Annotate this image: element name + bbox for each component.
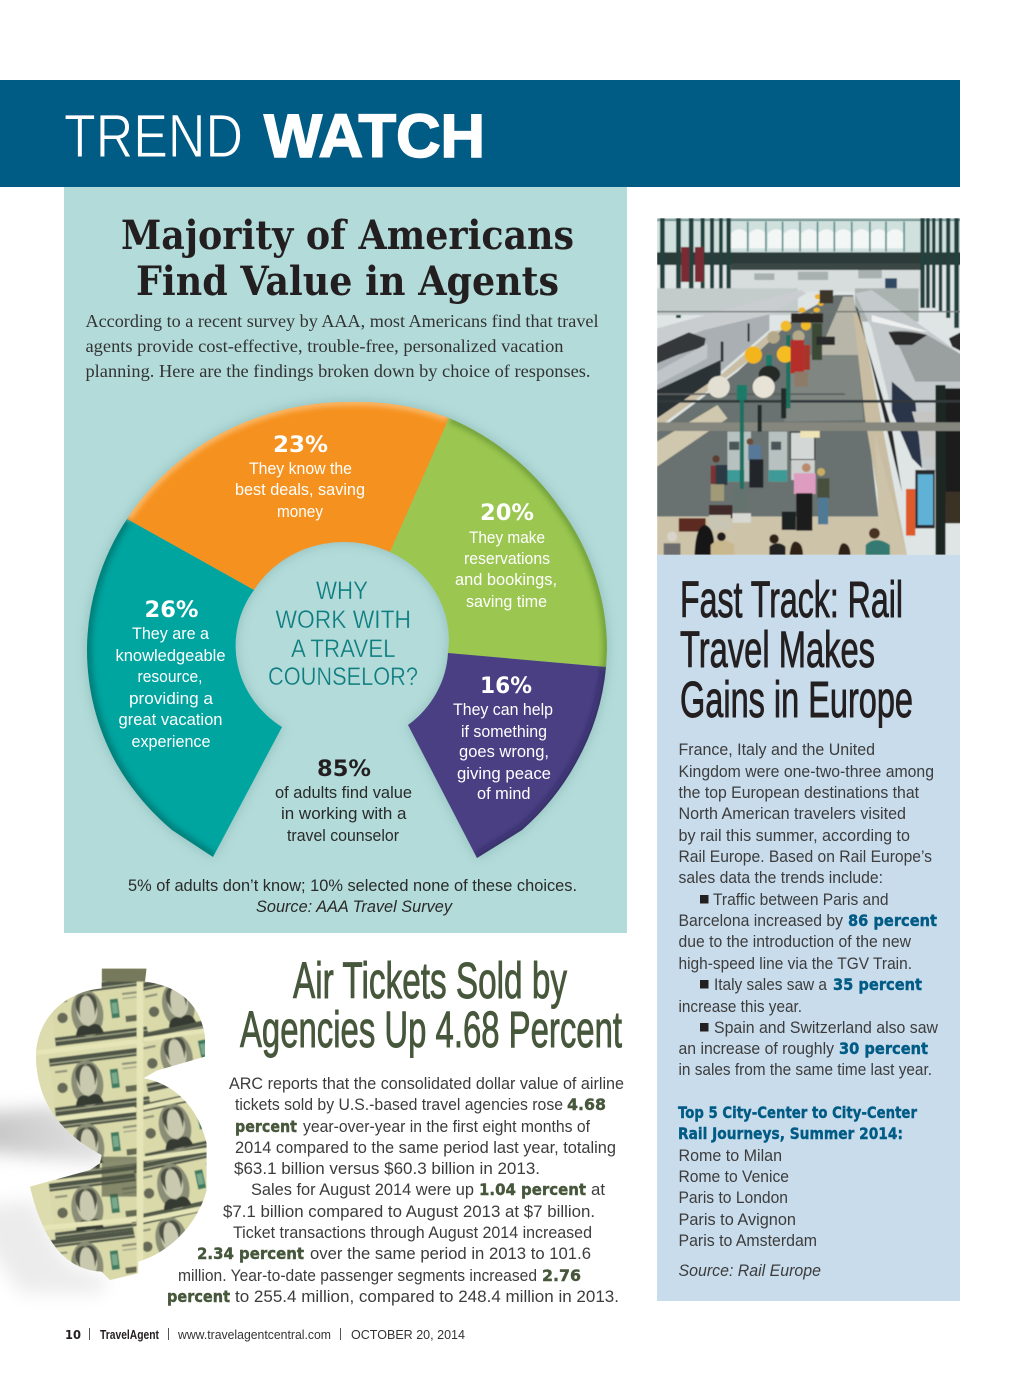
rail body text: Kingdom were one-two-three among [678, 763, 934, 781]
right train [855, 290, 962, 482]
label: 26 percent: resource, [138, 668, 202, 686]
air tickets body text: $63.1 billion versus $60.3 billion in 2013. [234, 1160, 540, 1178]
center question: WHY [316, 577, 368, 605]
intro text: planning. Here are the findings broken down by choice of responses. [86, 361, 590, 381]
main platform floor [657, 295, 878, 517]
panel: majority of Americans [64, 187, 627, 933]
intro text: According to a recent survey by AAA, most Americans find that travel [86, 311, 599, 331]
footer: TravelAgent [100, 1328, 160, 1342]
rail body text: 30 percent [839, 1039, 928, 1058]
footnote and source: Source: AAA Travel Survey [256, 898, 454, 916]
top 5 list heading [678, 1103, 917, 1143]
intro text [86, 311, 599, 381]
rail heading: Fast Track: Rail [680, 571, 903, 628]
air tickets body text: percent [167, 1287, 230, 1306]
rail body text: an increase of roughly [678, 1040, 835, 1058]
label: 20 percent: saving time [466, 593, 547, 611]
footer: OCTOBER 20, 2014 [351, 1328, 465, 1342]
label: 23 percent: best deals, saving [235, 481, 365, 499]
label: 85 percent: of adults find value [275, 784, 412, 802]
rail body text: due to the introduction of the new [678, 933, 911, 951]
label: 26 percent [116, 598, 226, 751]
rail body text: Rail Europe. Based on Rail Europe’s [678, 848, 932, 866]
rail body text: the top European destinations that [678, 784, 919, 802]
overhead wires [657, 422, 962, 431]
air tickets body text: 4.68 [567, 1095, 606, 1114]
air tickets heading: Air Tickets Sold by [293, 952, 567, 1009]
right platform edge [853, 312, 907, 555]
donut chart [87, 402, 607, 858]
air tickets body text: 2.34 percent [197, 1244, 304, 1263]
rail source: Source: Rail Europe [678, 1262, 821, 1280]
top 5 list: Paris to London [678, 1189, 788, 1207]
rail body text: 35 percent [833, 975, 922, 994]
air tickets body text: to 255.4 million, compared to 248.4 million in 2013. [235, 1288, 619, 1306]
label: 20 percent: 20% [480, 501, 534, 526]
label: 26 percent: experience [132, 733, 210, 751]
top 5 list: Rome to Venice [678, 1168, 789, 1186]
illustration: dollar sign made of bills [0, 968, 207, 1294]
label: 20 percent: reservations [464, 550, 550, 568]
rail body text: 86 percent [848, 911, 937, 930]
top 5 list: Rome to Milan [678, 1147, 782, 1165]
label: 85 percent: travel counselor [287, 827, 399, 845]
air tickets body text: over the same period in 2013 to 101.6 [310, 1245, 591, 1263]
intro text: agents provide cost-effective, trouble-free, personalized vacation [86, 336, 564, 356]
label: 16 percent: They can help [453, 701, 553, 719]
center question: WORK WITH [276, 606, 411, 634]
label: 16 percent: of mind [477, 785, 530, 803]
segment: 23% orange [127, 402, 449, 590]
header title: TREND [64, 102, 243, 170]
center question: COUNSELOR? [268, 663, 418, 691]
top 5 list heading: Top 5 City-Center to City-Center [678, 1103, 917, 1122]
footer: www.travelagentcentral.com [177, 1328, 331, 1342]
label: 26 percent: great vacation [118, 711, 222, 729]
air tickets body text: 1.04 percent [479, 1180, 586, 1199]
label: 16 percent: if something [461, 723, 547, 741]
label: 23 percent [235, 433, 365, 521]
label: 26 percent: knowledgeable [116, 647, 226, 665]
rail body text: North American travelers visited [678, 805, 906, 823]
label: 16 percent: goes wrong, [459, 743, 549, 761]
rail body text: increase this year. [678, 998, 802, 1016]
center question [268, 577, 418, 691]
label: 26 percent: They are a [132, 625, 210, 643]
photo: train station [657, 215, 962, 560]
panel: fast track rail [657, 555, 960, 1301]
rail body text: Traffic between Paris and [713, 891, 888, 909]
label: 20 percent: They make [469, 529, 545, 547]
left train [657, 290, 806, 348]
footnote and source [128, 877, 577, 916]
label: 26 percent: providing a [129, 690, 214, 708]
header title: WATCH [264, 102, 485, 170]
air tickets body text: tickets sold by U.S.-based travel agencies rose [235, 1096, 563, 1114]
panel heading: Majority of Americans [121, 212, 574, 259]
center question: A TRAVEL [291, 635, 396, 663]
rail body text: by rail this summer, according to [678, 827, 910, 845]
air tickets body text: at [591, 1181, 605, 1199]
header band [0, 80, 960, 187]
label: 23 percent: They know the [249, 460, 352, 478]
label: 16 percent [453, 674, 553, 803]
panel heading [121, 212, 574, 305]
rail heading: Travel Makes [680, 621, 875, 678]
ticket machines [727, 432, 787, 482]
label: 85 percent: 85% [317, 757, 371, 782]
top 5 list heading: Rail Journeys, Summer 2014: [678, 1124, 903, 1143]
rail body text: Italy sales saw a [714, 976, 828, 994]
label: 26 percent: 26% [144, 598, 198, 623]
panel: air tickets article [167, 952, 624, 1306]
top 5 list: Paris to Amsterdam [678, 1232, 817, 1250]
footer [65, 1327, 465, 1342]
rail heading [680, 571, 913, 728]
people [710, 465, 716, 484]
label: 16 percent: 16% [480, 674, 532, 699]
air tickets heading: Agencies Up 4.68 Percent [240, 1001, 622, 1058]
rail body text: sales data the trends include: [678, 869, 883, 887]
label: 23 percent: money [277, 503, 324, 521]
air tickets body text: ARC reports that the consolidated dollar value of airline [229, 1075, 624, 1093]
rail body text: high-speed line via the TGV Train. [678, 955, 912, 973]
left columns [660, 218, 731, 318]
air tickets body text [167, 1075, 624, 1306]
air tickets body text: million. Year-to-date passenger segments increased [178, 1267, 537, 1285]
air tickets body text: 2014 compared to the same period last year, totaling [235, 1139, 616, 1157]
label: 23 percent: 23% [273, 433, 328, 458]
lower floor [657, 517, 888, 555]
dollar shadow [0, 1107, 110, 1293]
label: 85 percent [275, 757, 412, 845]
panel heading: Find Value in Agents [136, 258, 559, 305]
label: 16 percent: giving peace [457, 765, 551, 783]
air tickets body text: Sales for August 2014 were up [251, 1181, 474, 1199]
rail body text: in sales from the same time last year. [678, 1061, 932, 1079]
air tickets body text: Ticket transactions through August 2014 increased [233, 1224, 592, 1242]
label: 20 percent: and bookings, [455, 571, 557, 589]
air tickets body text: $7.1 billion compared to August 2013 at $7 billion. [223, 1203, 595, 1221]
segment: 16% purple [408, 653, 606, 858]
air tickets body text: 2.76 [542, 1266, 581, 1285]
air tickets body text: percent [235, 1117, 297, 1136]
top 5 list: Paris to Avignon [678, 1211, 796, 1229]
top 5 list [678, 1147, 817, 1250]
segment: 20% green [390, 418, 607, 667]
rail body text: Barcelona increased by [678, 912, 844, 930]
rail body text: France, Italy and the United [678, 741, 875, 759]
rail body text [678, 741, 938, 1079]
rail body text: Spain and Switzerland also saw [714, 1019, 938, 1037]
air tickets heading [240, 952, 622, 1058]
header title [64, 102, 485, 170]
footnote and source: 5% of adults don’t know; 10% selected none of these choices. [128, 877, 577, 895]
label: 85 percent: in working with a [281, 805, 407, 823]
label: 20 percent [455, 501, 557, 611]
lamp post [740, 388, 744, 505]
segment: 26% teal [87, 519, 282, 857]
air tickets body text: year-over-year in the first eight months of [303, 1118, 590, 1136]
right columns [920, 218, 959, 328]
footer: 10 [65, 1327, 81, 1342]
